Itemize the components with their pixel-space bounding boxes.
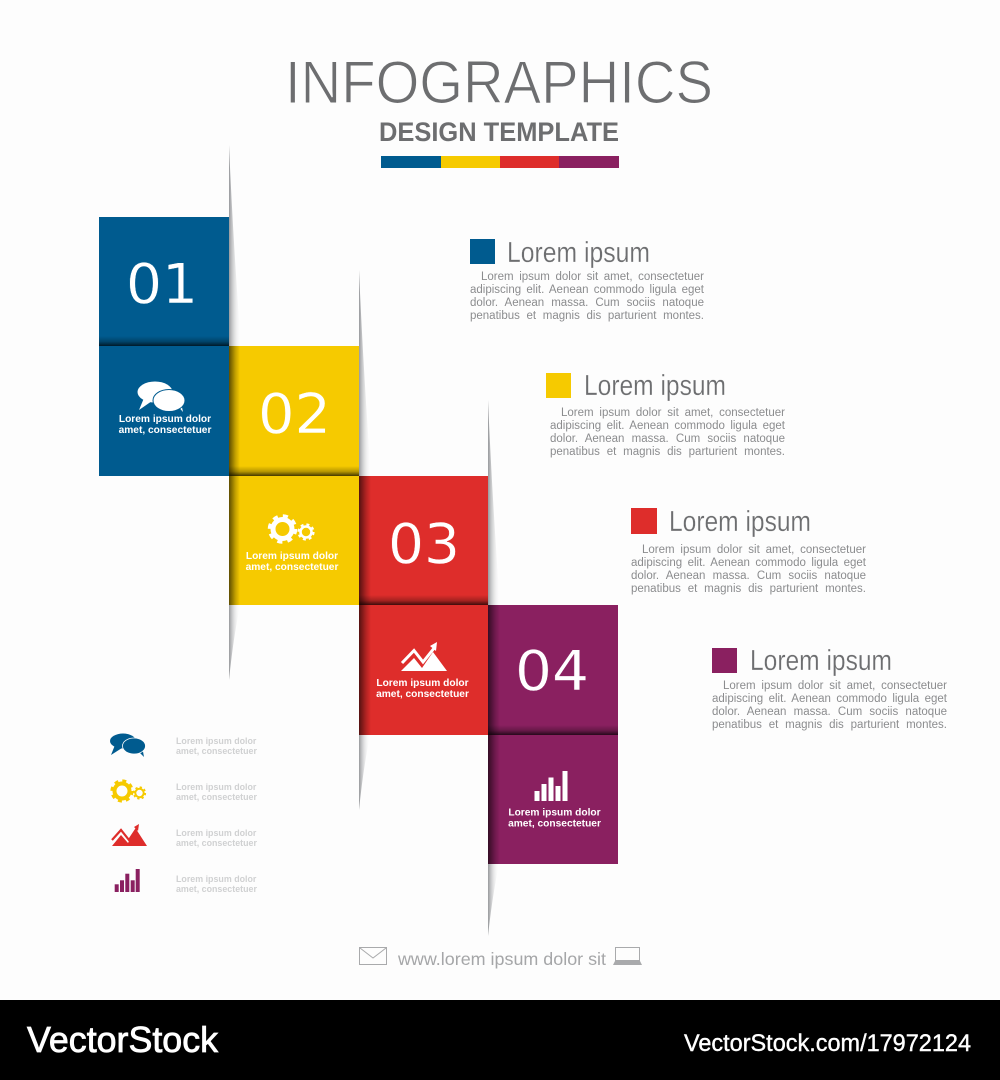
panel: step 02 detail: amet, consectetuer — [246, 562, 338, 573]
number 01: 01 — [126, 252, 198, 316]
item 1 body text: adipiscing elit. Aenean commodo ligula eget — [470, 284, 704, 296]
item 2 body text: dolor. Aenean massa. Cum sociis natoque — [550, 433, 785, 445]
legend: growth: Lorem ipsum dolor — [176, 828, 257, 838]
colour bar — [381, 156, 619, 168]
legend: gears: amet, consectetuer — [176, 792, 257, 802]
number 02: 02 — [258, 382, 331, 446]
item 3 body text: Lorem ipsum dolor sit amet, consectetuer — [642, 544, 866, 556]
panel: step 04 — [488, 605, 618, 735]
panel: step 02 detail — [229, 476, 359, 605]
item 1 body text: dolor. Aenean massa. Cum sociis natoque — [470, 297, 704, 309]
legend: chat — [110, 734, 257, 757]
item 3 body text: adipiscing elit. Aenean commodo ligula eget — [631, 557, 866, 569]
panel: step 03 detail: amet, consectetuer — [376, 689, 469, 700]
legend: gears: Lorem ipsum dolor — [176, 782, 257, 792]
item 1 marker — [470, 239, 495, 264]
legend: bars: amet, consectetuer — [176, 884, 257, 894]
legend: chat: amet, consectetuer — [176, 746, 257, 756]
number 03: 03 — [388, 512, 460, 576]
footer: envelope icon — [360, 948, 386, 964]
item 1 body text: penatibus et magnis dis parturient montes. — [470, 310, 704, 322]
item 2 marker — [546, 373, 571, 398]
icon: mountain chart — [401, 642, 447, 671]
item 2 heading: Lorem ipsum — [584, 370, 726, 402]
item 4 body text: adipiscing elit. Aenean commodo ligula eget — [712, 693, 947, 705]
watermark url: VectorStock.com/17972124 — [684, 1030, 971, 1057]
panel: step 04 detail — [488, 735, 618, 864]
watermark band — [0, 1000, 1000, 1080]
item 1 heading: Lorem ipsum — [507, 237, 650, 269]
item 3 body text — [631, 544, 866, 595]
panel: step 01 detail: amet, consectetuer — [119, 425, 211, 436]
icon: bar chart — [115, 869, 140, 892]
item 2 body text: Lorem ipsum dolor sit amet, consectetuer — [561, 407, 785, 419]
caption: Lorem ipsum dolor — [376, 678, 469, 689]
item 2 body text: adipiscing elit. Aenean commodo ligula eget — [550, 420, 785, 432]
panel: step 01 — [99, 217, 229, 346]
panel: step 04 detail: amet, consectetuer — [508, 818, 601, 830]
icon: gears — [112, 781, 145, 801]
watermark logo: VectorStock — [27, 1019, 219, 1060]
item 4 heading: Lorem ipsum — [750, 645, 892, 677]
item 1 body text — [470, 271, 704, 322]
legend: bars — [115, 869, 257, 894]
item 3 body text: dolor. Aenean massa. Cum sociis natoque — [631, 570, 866, 582]
caption: Lorem ipsum dolor — [119, 414, 211, 425]
legend: growth — [112, 824, 257, 848]
item 4 body text: dolor. Aenean massa. Cum sociis natoque — [712, 706, 947, 718]
number 04: 04 — [515, 639, 589, 703]
panel: step 01 detail — [99, 346, 229, 476]
item 1 body text: Lorem ipsum dolor sit amet, consectetuer — [481, 271, 704, 283]
legend: gears — [112, 781, 257, 802]
footer: laptop icon — [613, 948, 642, 965]
icon: gears — [270, 516, 314, 542]
icon: mountain chart — [112, 824, 147, 846]
panel: step 03 — [359, 476, 488, 605]
item 3 heading: Lorem ipsum — [669, 506, 811, 538]
legend: bars: Lorem ipsum dolor — [176, 874, 257, 884]
subtitle: DESIGN TEMPLATE — [379, 117, 619, 147]
icon: bar chart — [534, 771, 568, 801]
title: INFOGRAPHICS — [285, 49, 713, 116]
panel: step 02 — [229, 346, 359, 476]
item 4 body text: Lorem ipsum dolor sit amet, consectetuer — [723, 680, 947, 692]
panel: step 03 detail — [359, 605, 488, 735]
item 3 marker — [631, 508, 657, 534]
icon: chat bubbles — [138, 382, 185, 412]
caption: Lorem ipsum dolor — [246, 551, 338, 562]
icon: chat bubbles — [110, 734, 146, 757]
footer: website text: www.lorem ipsum dolor sit — [397, 949, 606, 969]
item 4 body text — [712, 680, 947, 731]
item 3 body text: penatibus et magnis dis parturient montes. — [631, 583, 866, 595]
item 4 body text: penatibus et magnis dis parturient montes. — [712, 719, 947, 731]
legend: chat: Lorem ipsum dolor — [176, 736, 257, 746]
item 2 body text: penatibus et magnis dis parturient montes. — [550, 446, 785, 458]
item 2 body text — [550, 407, 785, 458]
fold shadows — [229, 145, 500, 936]
legend: growth: amet, consectetuer — [176, 838, 257, 848]
caption: Lorem ipsum dolor — [508, 808, 601, 818]
item 4 marker — [712, 648, 737, 673]
